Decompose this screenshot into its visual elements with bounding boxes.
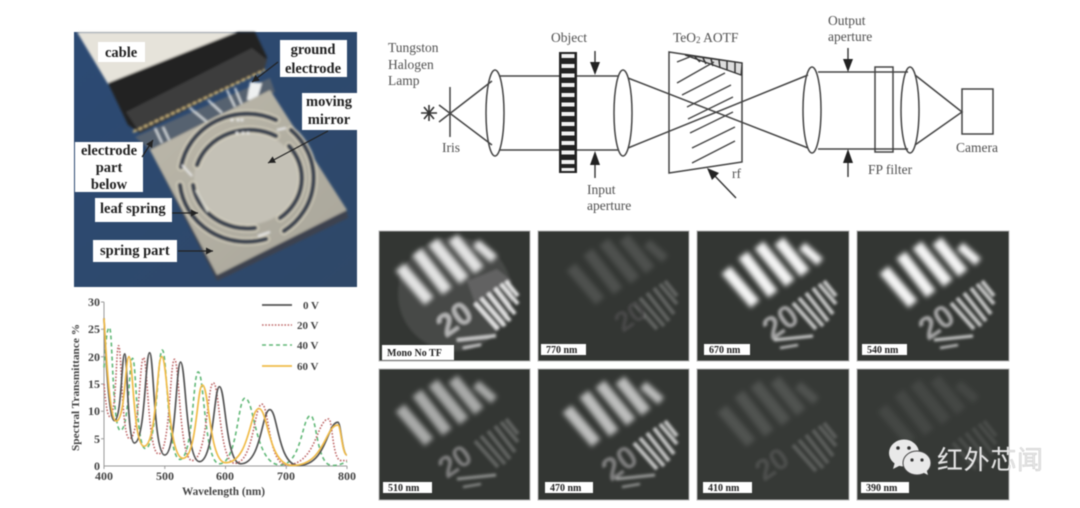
label: ground electrode: electrode	[285, 61, 342, 77]
chart axes and tick labels: 600	[216, 469, 234, 483]
label: moving mirror: moving	[306, 94, 353, 110]
image: 540 nm: 540 nm	[867, 345, 899, 356]
watermark: WeChat logo and name	[889, 440, 1043, 475]
chart axes and tick labels: 0	[94, 459, 100, 473]
image: 390 nm	[857, 369, 1009, 500]
object grating	[551, 30, 587, 173]
legend: 40 V	[297, 340, 319, 352]
output aperture arrows and label	[828, 13, 872, 177]
label: leaf spring: leaf spring	[100, 201, 166, 217]
legend: 20 V	[297, 320, 319, 332]
image: 510 nm	[379, 369, 530, 500]
object grating: Object	[551, 30, 587, 45]
label: spring part	[93, 240, 213, 262]
input parallel beam	[500, 76, 618, 150]
image: 470 nm: 20	[594, 438, 644, 488]
image: Mono No TF: 20	[429, 294, 479, 344]
image: 390 nm: 390 nm	[866, 483, 898, 494]
data curves	[104, 318, 347, 465]
lens 2	[614, 70, 632, 156]
label: ground electrode: ground	[291, 42, 335, 58]
input aperture arrows and label: aperture	[587, 198, 631, 213]
image: Mono No TF	[379, 231, 530, 361]
image grid: filtered images	[379, 231, 1009, 500]
camera: Camera	[956, 140, 998, 155]
photo: device with cable and spring plate	[77, 32, 348, 281]
TeO2 AOTF crystal: 2	[696, 35, 701, 45]
label: electrode part below: electrode	[81, 143, 138, 159]
iris: Iris	[442, 140, 460, 155]
chart axes and tick labels: 400	[95, 469, 113, 483]
label: moving mirror: mirror	[308, 112, 351, 128]
label: electrode part below	[75, 140, 153, 193]
curve: 40 V	[104, 328, 347, 465]
label: ground electrode	[252, 40, 347, 82]
rf arrow and label: rf	[732, 166, 741, 181]
label: cable: cable	[105, 45, 138, 61]
image: 470 nm	[538, 369, 689, 500]
icon: WeChat bubbles	[889, 440, 931, 475]
image: 670 nm	[697, 231, 849, 361]
image: 410 nm	[697, 369, 849, 500]
chart axes and tick labels: 5	[94, 432, 100, 446]
chart axes and tick labels	[88, 295, 356, 483]
watermark text: 红外芯闻	[937, 445, 1043, 475]
output aperture arrows and label: Output	[828, 13, 866, 28]
image: 470 nm: 470 nm	[550, 483, 582, 494]
curve: 60 V	[104, 318, 347, 465]
y axis title: Spectral Transmittance %	[70, 324, 82, 451]
chart axes and tick labels: 10	[88, 404, 100, 418]
image: 770 nm: 770 nm	[546, 345, 578, 356]
label: tungsten halogen lamp: Halogen	[388, 57, 434, 72]
curve: 20 V	[104, 346, 347, 465]
curve: 0 V	[104, 318, 347, 465]
chart axes and tick labels: 500	[156, 469, 174, 483]
TeO2 AOTF crystal: TeO	[673, 30, 696, 45]
FP filter: FP filter	[868, 162, 913, 177]
lens 1	[486, 70, 504, 156]
input aperture arrows and label: Input	[587, 182, 616, 197]
image: 670 nm: 20	[755, 297, 805, 347]
output aperture arrows and label: aperture	[828, 29, 872, 44]
legend: 0 V	[303, 300, 319, 312]
rf arrow and label	[707, 166, 741, 198]
label: cable	[98, 42, 145, 62]
legend	[262, 300, 319, 373]
chart axes and tick labels: 15	[88, 377, 100, 391]
image: 670 nm: 670 nm	[709, 345, 741, 356]
chart axes and tick labels: 30	[88, 295, 100, 309]
image: 410 nm: 410 nm	[708, 483, 740, 494]
beam to camera	[915, 75, 962, 145]
line chart: spectral transmittance vs wavelength	[70, 295, 356, 498]
x axis title: Wavelength (nm)	[182, 484, 265, 498]
chart axes and tick labels: 700	[277, 469, 295, 483]
camera	[956, 89, 998, 155]
chart axes and tick labels: 25	[88, 322, 100, 336]
label: electrode part below: below	[91, 177, 128, 193]
label: tungsten halogen lamp: Tungston	[388, 40, 439, 55]
image: 540 nm: 20	[911, 297, 961, 347]
label: electrode part below: part	[96, 160, 122, 176]
image: 770 nm	[538, 231, 689, 361]
FP filter	[868, 67, 913, 177]
label: moving mirror	[268, 93, 357, 163]
panel: MEMS filter photograph	[74, 32, 357, 287]
legend: 60 V	[297, 361, 319, 373]
TeO2 AOTF crystal: AOTF	[701, 30, 739, 45]
image: 510 nm: 20	[432, 439, 478, 485]
TeO2 AOTF crystal	[669, 30, 742, 173]
lens 3	[803, 67, 821, 153]
icon: lamp star	[421, 105, 437, 121]
image: 770 nm: 20	[609, 295, 652, 338]
chart axes and tick labels: 800	[338, 469, 356, 483]
image: 510 nm: 510 nm	[388, 483, 420, 494]
label: tungsten halogen lamp: Lamp	[388, 73, 420, 88]
iris	[439, 81, 492, 155]
output parallel beam	[818, 72, 908, 149]
label: spring part: spring part	[100, 243, 170, 259]
image: Mono No TF: Mono No TF	[387, 348, 442, 359]
image: 540 nm	[857, 231, 1009, 361]
chart axes and tick labels: 20	[88, 350, 100, 364]
lens 4	[901, 67, 919, 153]
image: 410 nm: 20	[749, 442, 795, 488]
crossing beams through crystal	[628, 75, 808, 148]
optical setup diagram	[388, 13, 998, 213]
label: leaf spring	[95, 198, 198, 222]
input aperture arrows and label	[587, 51, 631, 213]
